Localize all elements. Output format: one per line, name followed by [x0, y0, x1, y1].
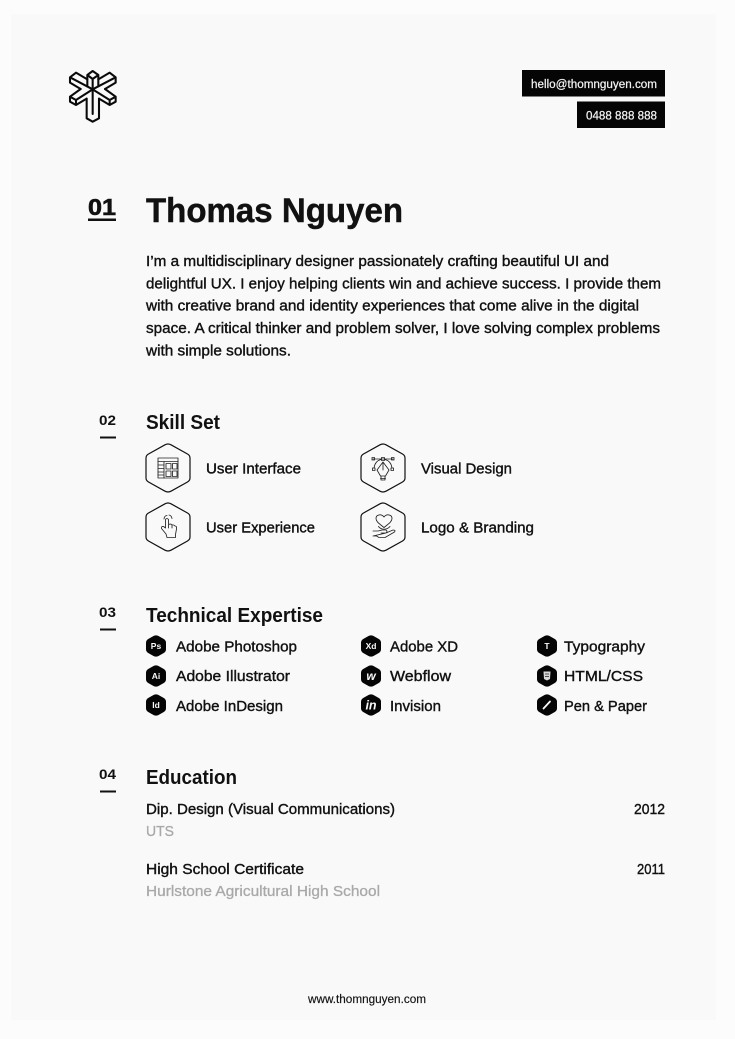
- tool: Typography: Typography: [564, 640, 646, 656]
- tool: Invision: in: [365, 698, 377, 712]
- heading: Technical Expertise: Technical Expertise: [146, 605, 323, 627]
- education: diploma: 2012: [634, 802, 665, 818]
- section number 02: [99, 413, 116, 438]
- tool: Adobe InDesign: Id: [152, 700, 160, 710]
- tool: Adobe InDesign: Adobe InDesign: [176, 699, 283, 715]
- section number 04: [99, 767, 117, 792]
- education: diploma: Dip. Design (Visual Communications): [146, 802, 395, 818]
- contact: phone: [577, 102, 665, 128]
- education: diploma: [146, 802, 665, 840]
- title: Thomas Nguyen: [146, 192, 403, 230]
- tool: HTML/CSS: HTML/CSS: [564, 669, 643, 685]
- intro paragraph: delightful UX. I enjoy helping clients win and achieve success. I provide them: [146, 276, 661, 292]
- education: high school: 2011: [637, 862, 665, 878]
- intro paragraph: with simple solutions.: [145, 343, 291, 359]
- tool: Adobe Illustrator: [146, 665, 290, 687]
- tool: Adobe Photoshop: [146, 635, 297, 657]
- skill: User Interface: [146, 444, 301, 492]
- tool: Adobe InDesign: [146, 694, 283, 716]
- logo: [70, 71, 116, 122]
- tool: Typography: T: [544, 641, 550, 651]
- tool: Webflow: Webflow: [390, 669, 452, 685]
- contact: phone: 0488 888 888: [586, 110, 657, 122]
- skill: Visual Design: Visual Design: [421, 462, 512, 478]
- skill: User Experience: User Experience: [206, 520, 315, 536]
- contact: email: [522, 70, 665, 96]
- tool: Adobe Illustrator: Adobe Illustrator: [176, 669, 290, 685]
- heading: Education: Education: [146, 767, 237, 789]
- contact: email: hello@thomnguyen.com: [531, 79, 657, 91]
- heading: Skill Set: Skill Set: [146, 412, 220, 434]
- section number 03: [99, 605, 117, 630]
- tool: Webflow: [361, 665, 452, 687]
- skill: User Experience: [146, 503, 315, 551]
- education: high school: [146, 862, 665, 900]
- skill: Logo & Branding: [361, 503, 534, 551]
- tool: Adobe XD: [361, 635, 458, 657]
- tool: Pen & Paper: Pen & Paper: [564, 699, 647, 715]
- intro paragraph: I’m a multidisciplinary designer passionately crafting beautiful UI and: [146, 254, 609, 270]
- tool: Adobe XD: Adobe XD: [390, 640, 458, 656]
- tool: Adobe Illustrator: Ai: [152, 671, 160, 681]
- section number 02: 02: [99, 413, 116, 428]
- tool: Invision: [361, 694, 441, 716]
- education: diploma: UTS: [146, 824, 174, 840]
- section number 01: 01: [88, 194, 116, 220]
- tool: Pen & Paper: [537, 694, 647, 716]
- education: high school: High School Certificate: [146, 862, 304, 878]
- section number 04: 04: [99, 767, 117, 782]
- skill: Logo & Branding: Logo & Branding: [421, 520, 534, 536]
- footer website: www.thomnguyen.com: [307, 994, 426, 1006]
- intro paragraph: with creative brand and identity experiences that come alive in the digital: [145, 299, 639, 315]
- tool: Adobe XD: Xd: [366, 641, 376, 651]
- tool: Webflow: w: [366, 669, 376, 683]
- section number 03: 03: [99, 605, 117, 620]
- intro paragraph: [145, 254, 661, 359]
- skill: User Interface: User Interface: [206, 462, 301, 478]
- tool: Invision: Invision: [390, 699, 441, 715]
- education: high school: Hurlstone Agricultural High School: [146, 884, 380, 900]
- tool: Adobe Photoshop: Adobe Photoshop: [176, 640, 297, 656]
- tool: Adobe Photoshop: Ps: [151, 641, 161, 651]
- intro paragraph: space. A critical thinker and problem solver, I love solving complex problems: [146, 321, 660, 337]
- tool: HTML/CSS: [537, 665, 643, 687]
- tool: Typography: [537, 635, 646, 657]
- skill: Visual Design: [361, 444, 512, 492]
